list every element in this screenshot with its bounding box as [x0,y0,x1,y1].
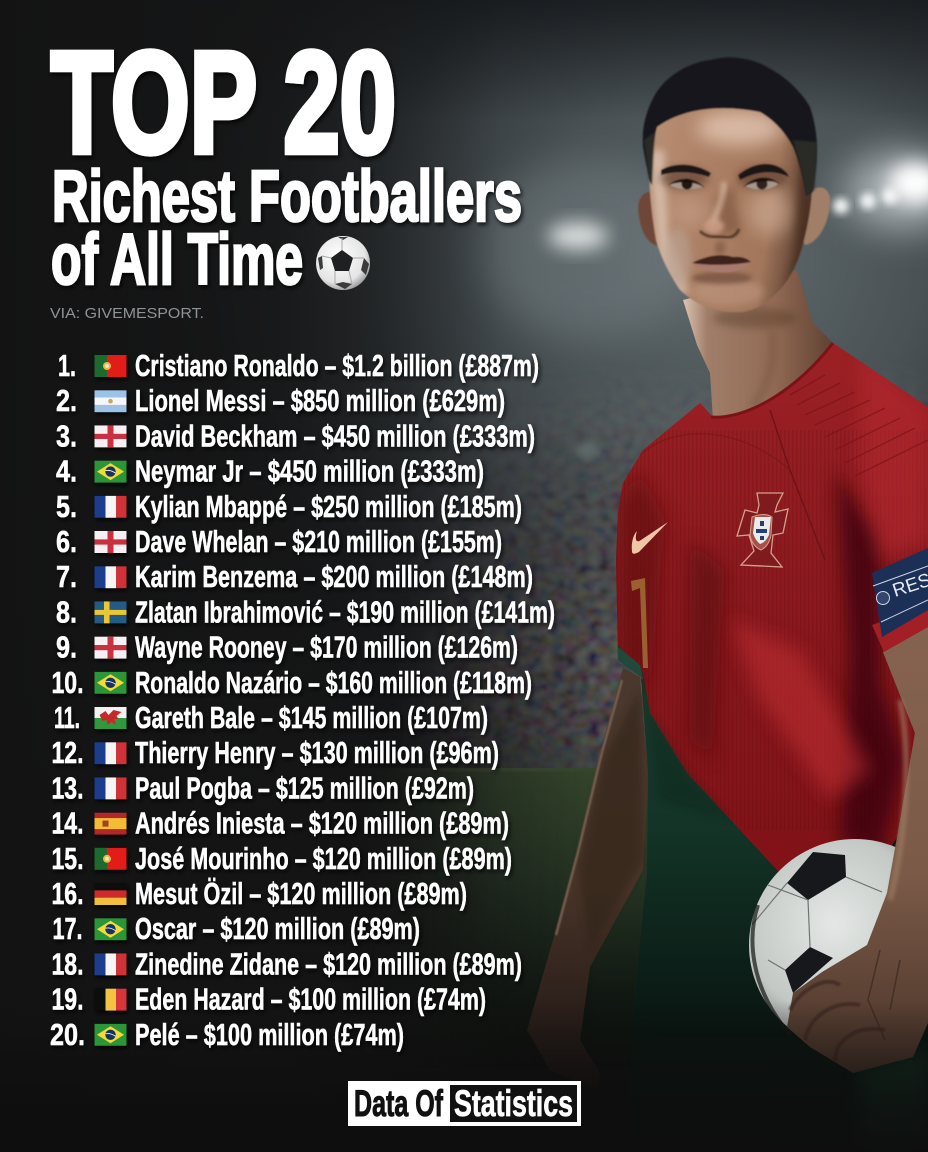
shirt: respect armband [872,548,928,637]
row 13 [52,770,474,805]
row 1: Cristiano Ronaldo – $1.2 billion (£887m) [135,348,539,383]
row 19 [52,982,486,1017]
row 1: 1. [58,348,76,383]
row 11: Gareth Bale – $145 million (£107m) [135,700,488,735]
row 5: 5. [56,489,77,524]
row 15: José Mourinho – $120 million (£89m) [135,841,512,876]
row 11: 11. [54,700,80,735]
row 12 [52,735,499,770]
player [527,57,928,1152]
row 13: 13. [52,770,84,805]
row 20: Pelé – $100 million (£74m) [135,1017,404,1052]
background: stadium crowd [428,394,915,770]
player: mouth [692,255,751,273]
row 8 [56,594,555,629]
row 7 [56,559,533,594]
row 18: 18. [52,946,84,981]
background: grass pitch [410,768,648,986]
player: eyebrows and eyes [661,164,789,190]
row 1 [58,348,539,383]
row 19: Eden Hazard – $100 million (£74m) [135,982,486,1017]
row 17: Oscar – $120 million (£89m) [135,911,420,946]
row 12: 12. [52,735,84,770]
row 5: Kylian Mbappé – $250 million (£185m) [135,489,522,524]
row 2: 2. [56,383,77,418]
logo: Data Of Statistics [348,1081,581,1126]
icon: nike swoosh [632,522,668,554]
shirt: green sleeve cuff [616,645,643,680]
ranking list [50,348,555,1052]
row 6: 6. [56,524,77,559]
bottom dark fade [0,1000,928,1152]
player: left arm [527,668,648,1090]
row 18: Zinedine Zidane – $120 million (£89m) [135,946,522,981]
shirt: red sleeve cuff [872,604,928,652]
row 13: Paul Pogba – $125 million (£92m) [135,770,474,805]
row 20: 20. [50,1017,85,1052]
row 3: 3. [56,418,77,453]
row 12: Thierry Henry – $130 million (£96m) [135,735,499,770]
row 19: 19. [52,982,84,1017]
player: hair [643,57,817,196]
football held under the arm [749,839,928,1051]
logo: Data Of Statistics: Statistics [454,1083,573,1124]
row 14: 14. [52,806,84,841]
row 9: Wayne Rooney – $170 million (£126m) [135,630,518,665]
row 9 [56,630,518,665]
player: ears [638,187,830,246]
row 15 [52,841,512,876]
row 17 [52,911,420,946]
subtitle: of All Time: of All Time [51,220,303,300]
player: face [648,107,812,313]
row 10 [52,665,532,700]
shirt: shoulder hatching [790,375,928,476]
row 20 [50,1017,404,1052]
player: shirt [600,330,928,1050]
face: nose [715,185,741,236]
row 10: 10. [52,665,84,700]
background: floodlights [480,152,928,458]
row 8: 8. [56,594,77,629]
subtitle: Richest Footballers: Richest Footballers [52,157,522,237]
row 2 [56,383,505,418]
row 11 [54,700,488,735]
player: forearm and hand over ball [787,627,928,1073]
shirt: fine stripes [600,430,928,830]
icon: portugal crest [737,493,788,567]
row 3 [56,418,535,453]
background: left dark vignette [0,0,500,1152]
row 14: Andrés Iniesta – $120 million (£89m) [135,806,509,841]
row 9: 9. [56,630,77,665]
row 4: 4. [56,454,77,489]
row 17: 17. [52,911,82,946]
row 6: Dave Whelan – $210 million (£155m) [135,524,502,559]
icon: shirt number 7 [631,578,648,668]
icon: football emoji [316,236,370,290]
player: neck [683,270,835,420]
row 2: Lionel Messi – $850 million (£629m) [135,383,505,418]
shirt: green lower panel [618,645,790,1037]
player: shorts [628,1015,928,1152]
shirt: collar [711,343,833,417]
row 7: 7. [56,559,77,594]
hair: faded sides [644,132,817,196]
row 16 [52,876,467,911]
row 14 [52,806,509,841]
row 15: 15. [52,841,84,876]
row 10: Ronaldo Nazário – $160 million (£118m) [135,665,532,700]
row 16: 16. [52,876,84,911]
row 18 [52,946,522,981]
player: head [638,57,830,320]
title: TOP 20: TOP 20 [51,22,396,183]
row 5 [56,489,522,524]
row 8: Zlatan Ibrahimović – $190 million (£141m) [135,594,555,629]
row 4: Neymar Jr – $450 million (£333m) [135,454,484,489]
hand: knuckle and vein shading [790,700,906,1062]
shirt: fold shading [618,350,928,860]
logo: Data Of Statistics: Data Of [354,1083,443,1124]
row 6 [56,524,502,559]
row 16: Mesut Özil – $120 million (£89m) [135,876,467,911]
row 3: David Beckham – $450 million (£333m) [135,418,535,453]
source line: VIA: GIVEMESPORT. [50,306,204,322]
row 4 [56,454,484,489]
row 7: Karim Benzema – $200 million (£148m) [135,559,533,594]
